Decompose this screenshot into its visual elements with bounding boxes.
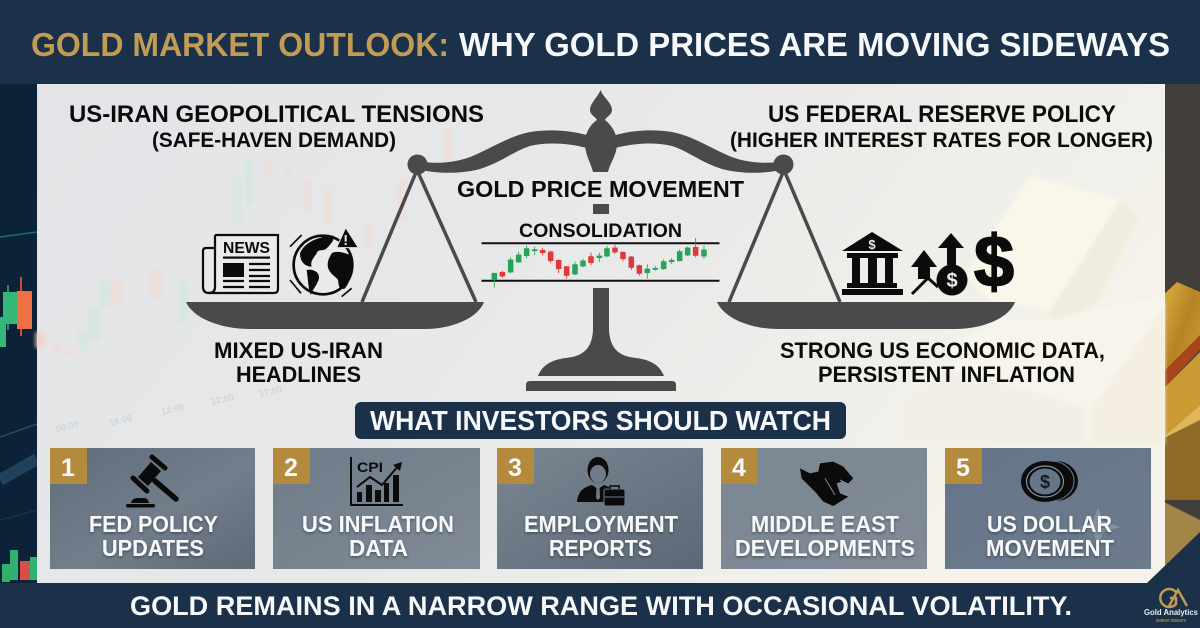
faint time axis labels: 00:00 — [55, 419, 80, 434]
faint chart candles behind panel — [35, 130, 451, 355]
center label: GOLD PRICE MOVEMENT — [457, 176, 744, 202]
faint time axis labels — [55, 384, 283, 434]
card text — [524, 511, 678, 561]
right heading — [730, 101, 1153, 152]
decorative sparkle — [1080, 507, 1120, 546]
card text — [735, 511, 915, 561]
icon: newspaper: NEWS — [223, 240, 270, 257]
card text — [89, 511, 218, 561]
card text: US INFLATION — [302, 511, 454, 537]
card text: REPORTS — [549, 535, 652, 561]
icon: cpi chart — [351, 457, 403, 505]
badge 5: 5 — [956, 454, 970, 482]
right pan — [717, 302, 1015, 329]
badge 4 — [721, 448, 758, 484]
icon: rising arrows and coin — [911, 233, 968, 296]
card text: DATA — [349, 535, 408, 561]
scale finial — [585, 90, 617, 172]
pivot balls — [408, 154, 794, 174]
badge 1: 1 — [61, 454, 75, 482]
panel: main light content — [35, 84, 1165, 583]
left heading: US-IRAN GEOPOLITICAL TENSIONS — [69, 101, 484, 128]
card 2: us inflation data — [273, 448, 480, 569]
card 5: us dollar movement — [945, 448, 1151, 569]
card 3: employment reports — [497, 448, 703, 569]
card 4: middle east developments — [721, 448, 927, 569]
badge 3 — [497, 448, 534, 484]
card text: US DOLLAR — [987, 511, 1112, 537]
left heading — [69, 101, 484, 152]
title: WHY GOLD PRICES ARE MOVING SIDEWAYS — [459, 26, 1170, 63]
logo: gold analytics: Gold Analytics — [1144, 608, 1199, 617]
card text: DEVELOPMENTS — [735, 535, 915, 561]
faint time axis labels: 12:00 — [160, 402, 185, 417]
card text: UPDATES — [102, 535, 204, 561]
badge 4: 4 — [732, 454, 746, 482]
consolidation label: CONSOLIDATION — [519, 221, 682, 242]
balance scale — [186, 90, 1015, 391]
bottom banner — [0, 532, 1200, 628]
card text: FED POLICY — [89, 511, 218, 537]
card text: MIDDLE EAST — [751, 511, 899, 537]
scale beam — [417, 130, 785, 173]
card 1: fed policy updates — [50, 448, 255, 569]
section heading: what investors should watch: WHAT INVESTORS SHOULD WATCH — [370, 405, 831, 436]
faint time axis labels: 17:00 — [258, 384, 283, 399]
background: trading chart left side — [0, 84, 40, 584]
title: GOLD MARKET OUTLOOK: — [31, 26, 449, 63]
left scale caption — [214, 338, 383, 387]
right heading: US FEDERAL RESERVE POLICY — [768, 101, 1116, 128]
right heading: (HIGHER INTEREST RATES FOR LONGER) — [730, 129, 1153, 152]
logo: gold analytics: MARKET INSIGHTS — [1156, 618, 1186, 623]
icon: coin stack: $ — [1040, 472, 1050, 492]
icon: newspaper — [203, 235, 278, 293]
scale column and base — [538, 288, 664, 376]
faint gold bars behind panel — [900, 176, 1165, 445]
icon: bank — [842, 232, 903, 295]
right scale caption: PERSISTENT INFLATION — [818, 362, 1075, 387]
left heading: (SAFE-HAVEN DEMAND) — [152, 129, 396, 152]
title — [31, 26, 1170, 63]
card text: EMPLOYMENT — [524, 511, 678, 537]
icon: globe with warning — [290, 228, 358, 297]
candlestick chart: consolidation range — [482, 238, 720, 288]
badge 3: 3 — [508, 454, 522, 482]
right scale caption — [780, 338, 1105, 387]
upper stem stub — [593, 204, 609, 214]
icon: cpi chart: CPI — [357, 459, 383, 475]
top title bar — [0, 0, 1200, 84]
left pan — [186, 302, 484, 329]
scale foot — [526, 381, 676, 391]
background: gold bars right side — [1160, 84, 1200, 584]
badge 2 — [273, 448, 310, 484]
icon: coin stack — [1021, 461, 1078, 502]
left scale caption: MIXED US-IRAN — [214, 338, 383, 363]
bottom takeaway text: GOLD REMAINS IN A NARROW RANGE WITH OCCASIONAL VOLATILITY. — [130, 591, 1072, 621]
icon: dollar sign: $ — [974, 222, 1014, 302]
card text — [302, 511, 454, 561]
left scale caption: HEADLINES — [236, 362, 361, 387]
badge 1 — [50, 448, 87, 484]
icon: rising arrows and coin: $ — [946, 270, 958, 292]
icon: businessperson — [577, 457, 625, 506]
right pan hanger — [729, 170, 840, 302]
card text — [986, 511, 1114, 561]
badge 5 — [945, 448, 982, 484]
card text: MOVEMENT — [986, 535, 1114, 561]
icon: middle east map — [800, 462, 853, 506]
logo: gold analytics — [1144, 589, 1199, 623]
icon: gavel — [126, 457, 176, 508]
badge 2: 2 — [284, 454, 298, 482]
right scale caption: STRONG US ECONOMIC DATA, — [780, 338, 1105, 363]
icon: bank: $ — [868, 237, 876, 252]
left pan hanger — [362, 170, 476, 302]
faint time axis labels: 12:00 — [210, 392, 235, 407]
faint time axis labels: 18:00 — [108, 413, 133, 428]
